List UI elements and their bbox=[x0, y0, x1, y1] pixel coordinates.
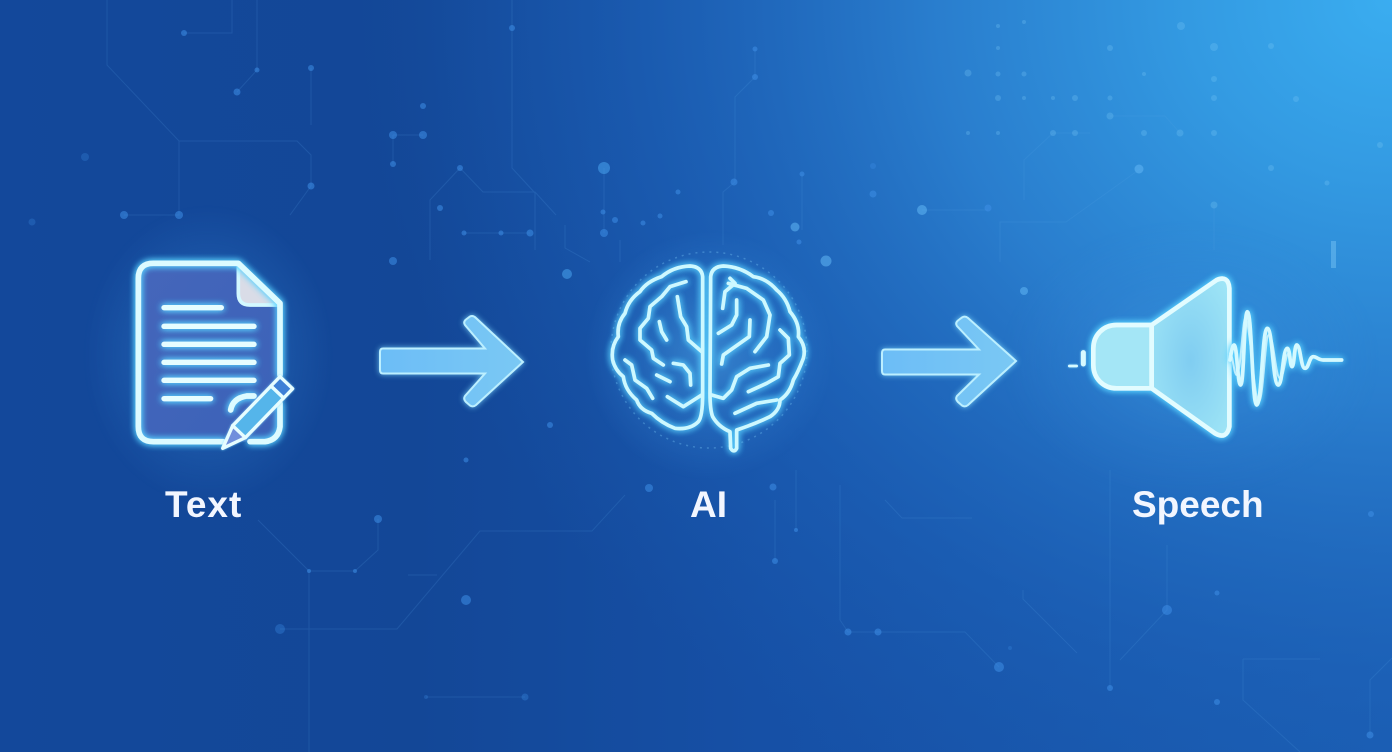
dotted ring around brain bbox=[611, 252, 807, 448]
arrow 2 bbox=[882, 317, 1016, 406]
pencil bbox=[223, 377, 293, 448]
label: Speech: Speech bbox=[1132, 484, 1264, 525]
light bar top right of speaker bbox=[1331, 241, 1336, 268]
text lines bbox=[164, 308, 254, 399]
speaker body bbox=[1093, 279, 1229, 436]
label: Text: Text bbox=[165, 484, 242, 525]
right hemisphere bbox=[710, 266, 804, 451]
icon: speaker with sound wave bbox=[1069, 279, 1342, 436]
document sheet bbox=[138, 263, 280, 442]
icon: document with pencil bbox=[138, 263, 293, 448]
document outline bbox=[138, 263, 280, 442]
left hemisphere bbox=[612, 266, 703, 429]
icon: brain bbox=[612, 266, 804, 451]
sound wave bbox=[1230, 312, 1342, 405]
small input ticks bbox=[1069, 353, 1083, 366]
arrow 1 bbox=[380, 316, 523, 406]
label: AI: AI bbox=[690, 484, 727, 525]
icon halos bbox=[83, 205, 1380, 505]
dot grid top right bbox=[964, 20, 1383, 208]
folded corner bbox=[238, 263, 280, 305]
